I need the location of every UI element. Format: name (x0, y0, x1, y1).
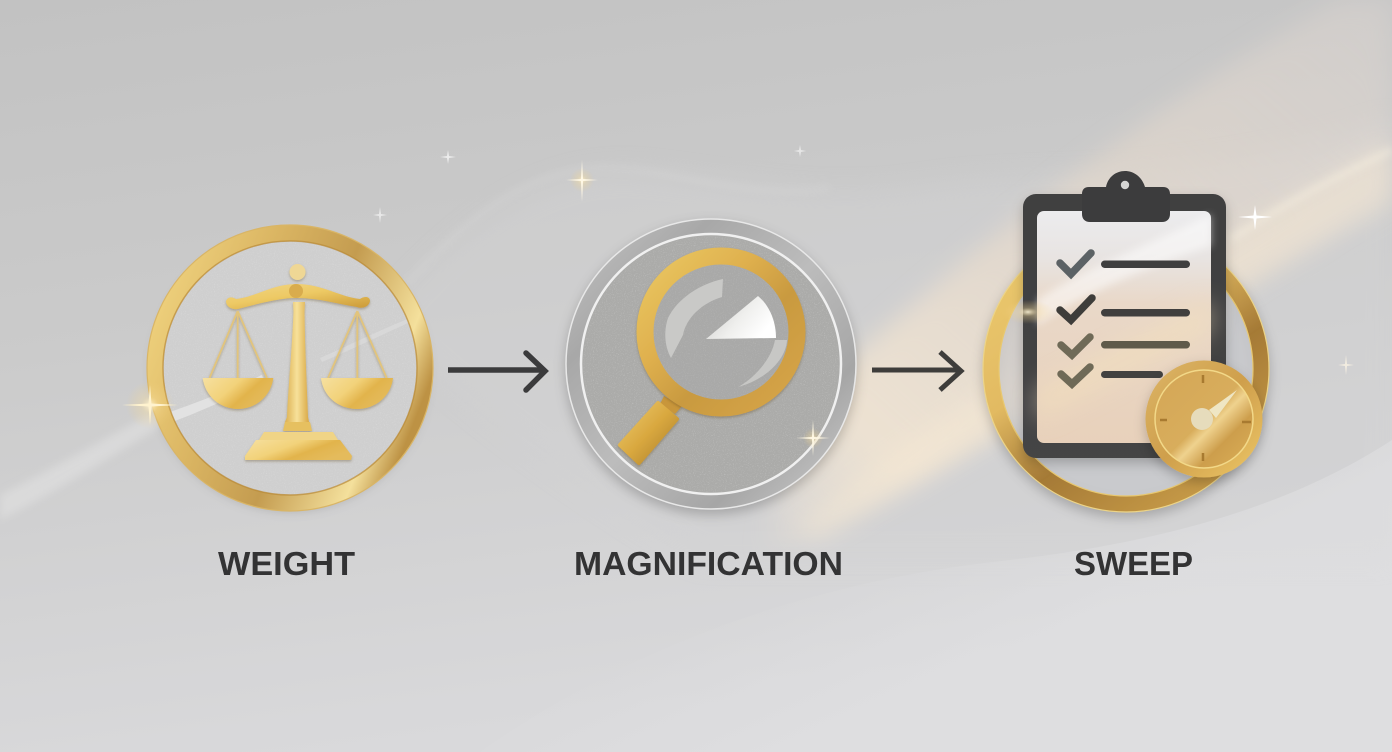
gold sparkle on left ring (122, 381, 178, 429)
handle (620, 396, 682, 463)
paper (1037, 211, 1211, 443)
scale disc (154, 232, 426, 504)
label: magnification: MAGNIFICATION (574, 545, 843, 582)
clip (1082, 171, 1170, 222)
arrow 2 (872, 352, 961, 390)
arrow 1 (448, 353, 545, 390)
clipboard board (1023, 194, 1226, 458)
top knobs (290, 264, 306, 280)
pans (203, 378, 273, 409)
check 4 (1061, 367, 1163, 384)
gauge (1146, 360, 1262, 478)
gold ring (155, 233, 425, 503)
check 2 (1060, 298, 1190, 320)
gold ring (991, 234, 1261, 504)
check 3 (1061, 337, 1190, 355)
icon: balance scale in gold ring (147, 225, 433, 511)
lens highlights (665, 279, 723, 358)
lens (645, 256, 797, 408)
scale figure (203, 264, 393, 460)
base (283, 422, 312, 431)
check 1 (1060, 253, 1190, 274)
column (285, 302, 309, 422)
sparkle on silver ring (796, 420, 830, 456)
silver disc (566, 218, 856, 510)
label: weight: WEIGHT (218, 545, 355, 582)
icon: magnifying glass in silver ring (566, 218, 856, 510)
sparkle on clipboard ring (1002, 300, 1054, 324)
beam (226, 284, 370, 309)
strings (210, 311, 387, 378)
sparkles (373, 145, 1354, 375)
icon: clipboard checklist with gold ring and gauge (983, 171, 1269, 512)
label: sweep: SWEEP (1074, 545, 1193, 582)
